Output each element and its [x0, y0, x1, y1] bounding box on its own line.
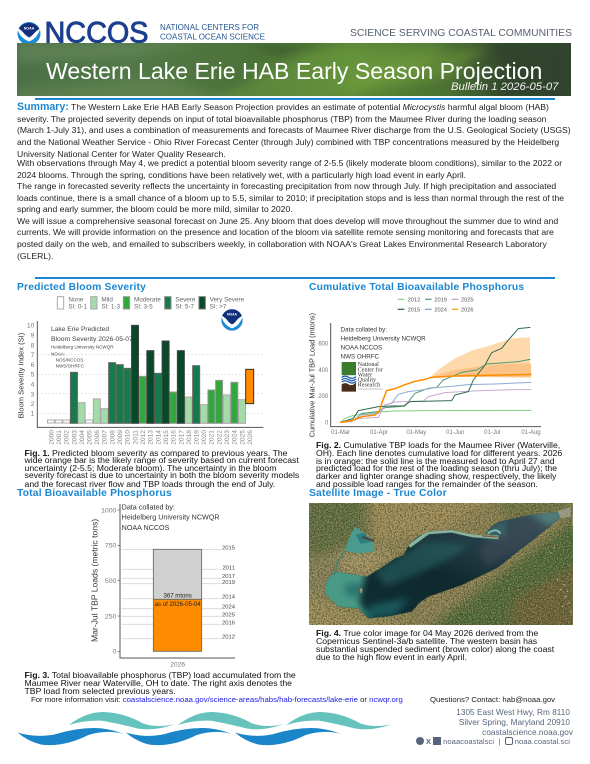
summary text: The range in forecasted severity reflects the uncertainty in forecasting precipitation from now through July. If high precipitation and associated	[17, 181, 556, 191]
data credit: NOAA NCCOS	[122, 524, 170, 532]
legend: Very Severe	[210, 297, 245, 304]
chart: cumulative TBP load: 0	[325, 420, 329, 426]
chart: bloom severity bars: 4	[31, 381, 35, 388]
footer: contact: Questions? Contact: hab@noaa.gov	[430, 695, 555, 704]
caption: figure 4: due to the high flow event in early April.	[316, 652, 467, 662]
summary text: (GLERL).	[17, 251, 53, 261]
caption: figure 4: Copernicus Sentinel-3a/b satellite. The western basin has	[316, 636, 537, 646]
footer: address	[416, 708, 573, 746]
caption: figure 4	[72, 588, 554, 722]
chart: cumulative TBP load: 01-Apr	[370, 430, 388, 436]
chart: cumulative TBP load: 600	[318, 342, 329, 348]
legend: SI: 0-1	[68, 304, 87, 311]
year labels: 2001	[56, 430, 63, 445]
logo: National Center for Water Quality Research: Quality	[358, 378, 377, 384]
title: Western Lake Erie HAB Early Season Projection	[46, 58, 542, 84]
right axis year labels: 2015	[222, 545, 235, 551]
chart annotation	[51, 326, 133, 369]
chart: bloom severity bars	[17, 296, 264, 445]
right axis year labels: 2012	[222, 635, 235, 641]
chart: total TBP bar: 0	[113, 649, 117, 656]
legend: SI: 1-3	[101, 304, 120, 311]
logo: National Center for Water Quality Research: Water	[358, 372, 372, 378]
chart: bloom severity bars: 10	[27, 323, 35, 330]
chart: bloom severity bars: 2	[31, 401, 35, 408]
chart: cumulative TBP load: 01-Jun	[446, 430, 464, 436]
summary text: currents. We will provide information on the presence and location of the bloom via satellite remote sensing monitoring and forecasts that are	[17, 227, 554, 237]
caption: figure 2: Fig. 2. Cumulative TBP loads for the Maumee River (Waterville,	[316, 440, 560, 450]
chart: bloom severity bars: Bloom Severity Index (SI)	[17, 332, 26, 418]
legend: Mild	[101, 297, 113, 304]
legend: 2019	[434, 297, 447, 303]
summary text: 2024 blooms. Through the spring, conditions have been relatively wet, with a particularly high load event in early April.	[17, 170, 466, 180]
caption: figure 1: and the forecast river flow and TBP loads through the end of July.	[24, 478, 275, 488]
year labels: 2010	[125, 430, 132, 445]
caption: figure 2: predicted load for the rest of the loading season (thru July); the	[316, 463, 557, 473]
load lines	[341, 327, 531, 422]
caption: figure 1: severity forecast is due to uncertainty in both the bloom severity models	[24, 470, 299, 480]
logo: National Center for Water Quality Research: Center for	[358, 366, 383, 373]
legend: 2024	[434, 307, 447, 313]
chart annotation: NWS/OHRFC	[56, 364, 85, 369]
social handles: X noaacoastalsci | noaa.coastal.sci	[426, 737, 570, 746]
summary text: loads continue, there is a small chance of a bloom up to 5.5, similar to 2010; if precipitation stops and is less than normal through the rest of the	[17, 193, 564, 203]
logo: National Center for Water Quality Research	[342, 362, 383, 392]
chart: bloom severity bars: 6	[31, 362, 35, 369]
caption: figure 3: Maumee River near Waterville, OH to date. The right axis denotes the	[24, 678, 292, 688]
teal waves	[69, 712, 392, 729]
legend: 2015	[408, 307, 420, 313]
year labels: 2022	[216, 430, 223, 445]
chart: total TBP bar: 250	[105, 613, 117, 620]
right axis year labels: 2016	[222, 620, 235, 626]
chart: total TBP bar: 2026	[170, 662, 185, 669]
heading: Predicted Bloom Severity: Predicted Bloom Severity	[17, 282, 146, 293]
tagline: SCIENCE SERVING COASTAL COMMUNITIES	[350, 28, 572, 39]
data credit: NOAA NCCOS	[341, 344, 382, 351]
caption: figure 3: TBP load from selected previous years.	[24, 686, 176, 696]
chart: total TBP bar: 500	[105, 578, 117, 585]
right axis year labels: 2024	[222, 605, 236, 611]
chart annotation: NOAA:	[51, 351, 65, 356]
chart: cumulative TBP load: 01-Aug	[521, 430, 541, 436]
chart annotation: Bloom Severity 2026-05-07	[51, 336, 133, 343]
reference year lines	[122, 550, 222, 639]
summary text: posted daily on the web, and emailed to subscribers weekly, in collaboration with NOAA's Great Lakes Environmental Research Laboratory	[17, 239, 547, 249]
legend: Moderate	[134, 297, 161, 304]
year labels: 2002	[64, 430, 71, 445]
legend	[57, 297, 245, 311]
caption: figure 3: Fig. 3. Total bioavailable phosphorus (TBP) load accumulated from the	[24, 670, 296, 680]
heading: Total Bioavailable Phosphorus: Total Bioavailable Phosphorus	[17, 488, 172, 499]
chart annotation: Heidelberg University NCWQR	[51, 345, 114, 350]
legend	[398, 297, 474, 313]
bulletin date: Bulletin 1 2026-05-07	[451, 81, 558, 93]
legend: None	[68, 297, 84, 304]
island and clouds	[360, 588, 362, 593]
bar: 2026 load	[153, 549, 202, 651]
chart: bloom severity bars: 1	[31, 411, 35, 418]
year labels: 2020	[201, 430, 208, 445]
legend: 2012	[408, 297, 420, 303]
icon: NOAA emblem: NOAA	[24, 26, 35, 30]
year labels: 2018	[186, 430, 193, 445]
chart: bloom severity bars: 5	[31, 372, 35, 379]
wordmark subtitle	[160, 22, 265, 42]
chart: cumulative TBP load	[308, 297, 541, 437]
legend: Severe	[175, 297, 196, 304]
footer: address: Silver Spring, Maryland 20910	[459, 718, 570, 727]
right axis year labels: 2011	[222, 566, 235, 572]
wordmark subtitle: NATIONAL CENTERS FOR	[160, 22, 259, 32]
year labels: 2006	[94, 430, 101, 445]
year labels: 2015	[163, 430, 170, 445]
year labels: 2008	[109, 430, 116, 445]
axes	[120, 504, 235, 658]
chart: total TBP bar: as of 2026-05-04	[155, 601, 201, 608]
heading: Satellite Image: Satellite Image - True Color	[309, 488, 447, 499]
caption: figure 2: is in orange: the solid line is the measured load to April 27 and	[316, 456, 555, 466]
axes	[37, 321, 263, 427]
summary text: (March 1-July 31), and uses a combination of measurements and forecasts of Maumee River discharge from the U.S. Geological Society (USGS)	[17, 125, 571, 135]
chart: bloom severity bars: 3	[31, 391, 35, 398]
satellite image: Lake Erie	[108, 503, 573, 746]
caption: figure 2: and possible load ranges for the remainder of the season.	[316, 479, 538, 489]
data credit	[122, 503, 219, 532]
year labels: 2009	[117, 430, 124, 445]
forecast ranges	[428, 337, 530, 378]
summary text	[17, 100, 571, 261]
caption: figure 1	[24, 448, 299, 488]
summary text: spring and early summer, the bloom could be more mild, similar to 2020.	[17, 204, 293, 214]
legend: SI: 3-5	[134, 304, 153, 311]
right axis year labels: 2014	[222, 595, 236, 601]
year labels: 2005	[87, 430, 94, 445]
chart: total TBP bar	[89, 503, 236, 669]
legend: SI: 5-7	[175, 304, 194, 311]
data credit: Heidelberg University NCWQR	[122, 514, 219, 522]
icon: NOAA emblem small	[221, 309, 243, 331]
right axis year labels	[222, 545, 236, 641]
year labels: 2017	[178, 430, 185, 445]
caption: figure 1: uncertainty (2-5.5; Moderate bloom). The uncertainty in the bloom	[24, 462, 276, 472]
year labels: 2004	[79, 430, 86, 445]
right axis year labels: 2017	[222, 574, 235, 580]
logo: National Center for Water Quality Research: National	[358, 362, 379, 368]
caption: figure 1: wide orange bar is the likely range of severity based on current forecast	[24, 455, 299, 465]
year labels: 2011	[132, 430, 139, 444]
right axis year labels: 2025	[222, 613, 235, 619]
year labels: 2019	[194, 430, 201, 445]
heading: Cumulative TBP: Cumulative Total Bioavailable Phosphorus	[309, 282, 524, 293]
caption: figure 4: Fig. 4. True color image for 04 May 2026 derived from the	[316, 628, 538, 638]
year labels: 2014	[155, 430, 162, 445]
chart: bloom severity bars: 8	[31, 342, 35, 349]
year labels: 2026	[247, 430, 254, 445]
chart: cumulative TBP load: 01-Mar	[331, 430, 350, 436]
legend: SI: >7	[210, 304, 227, 311]
year labels: 2016	[171, 430, 178, 445]
chart: bloom severity bars: 7	[31, 352, 35, 359]
year labels: 2023	[224, 430, 231, 445]
data credit: NWS OHRFC	[341, 353, 380, 360]
chart annotation: Lake Erie Predicted	[51, 326, 109, 333]
summary text: With observations through May 4, we predict a potential bloom severity range of 2-5.5 (likely moderate bloom conditions), similar to the 2022 or	[17, 158, 562, 168]
caption: figure 3	[24, 670, 296, 696]
year labels: 2000	[48, 430, 55, 445]
caption: figure 4: substantial suspended sediment (brown color) along the coast	[316, 644, 554, 654]
summary text: University National Center for Water Quality Research.	[17, 149, 226, 159]
axes	[331, 323, 541, 427]
icon: NOAA emblem small: NOAA	[227, 312, 237, 316]
summary text: and the National Weather Service - Ohio River Forecast Center (through July) combined with TBP concentrations measured by the Heidelberg	[17, 137, 559, 147]
year labels: 2024	[232, 430, 239, 445]
waves graphic	[18, 712, 392, 746]
summary text: severity. The projected severity depends on input of total bioavailable phosphorus (TBP) from the Maumee River during the loading season	[17, 114, 546, 124]
year labels: 2012	[140, 430, 147, 445]
footer: more information: For more information visit: coastalscience.noaa.gov/science-areas/habs/hab-forecasts/lake-erie or ncwqr.org	[31, 695, 403, 704]
chart annotation: NOS/NCCOS	[56, 357, 83, 362]
logo: National Center for Water Quality Research: Research	[358, 383, 380, 389]
summary text: Summary: The Western Lake Erie HAB Early Season Projection provides an estimate of potential Microcystis harmful algal bloom (HAB)	[17, 100, 549, 112]
data credit: Data collated by:	[122, 503, 175, 511]
caption: figure 2: darker and lighter orange shading show, respectively, the likely	[316, 471, 556, 481]
chart: cumulative TBP load: 400	[318, 368, 329, 374]
header logo: NCCOS	[18, 20, 265, 45]
year labels: 2013	[148, 430, 155, 445]
legend: 2026	[461, 307, 474, 313]
chart: cumulative TBP load: 01-Jul	[484, 430, 500, 436]
year labels: 2021	[209, 430, 216, 445]
year labels	[48, 430, 254, 445]
lake body	[325, 512, 560, 618]
icon: NOAA emblem	[18, 22, 40, 45]
wordmark subtitle: COASTAL OCEAN SCIENCE	[160, 32, 265, 42]
title banner	[17, 43, 571, 96]
caption: figure 2	[316, 440, 562, 489]
chart: total TBP bar: 1000	[101, 507, 117, 514]
chart: total TBP bar: 367 mtons	[163, 592, 192, 599]
Lake St Clair and rivers	[334, 507, 571, 574]
bars	[47, 325, 254, 423]
data credit: Data collated by:	[341, 326, 387, 333]
chart: cumulative TBP load: 200	[318, 394, 329, 400]
chart: total TBP bar: 750	[105, 543, 117, 550]
year labels: 2025	[239, 430, 246, 445]
chart: cumulative TBP load: 01-May	[406, 430, 426, 436]
right axis year labels: 2019	[222, 580, 235, 586]
year labels: 2007	[102, 430, 109, 445]
chart: total TBP bar: Mar-Jul TBP Loads (metric tons)	[89, 519, 99, 642]
summary text: We will issue a comprehensive seasonal forecast on June 25. Any bloom that does develop will move throughout the summer due to wind and	[17, 216, 558, 226]
data credit: Heidelberg University NCWQR	[341, 335, 426, 342]
caption: figure 2: OH). Each line denotes cumulative load for different years. 2026	[316, 448, 562, 458]
footer: address: 1305 East West Hwy, Rm 8110	[456, 708, 570, 717]
blue waves	[18, 728, 341, 745]
chart: cumulative TBP load: Cumulative Mar-Jul TBP Load (mtons)	[308, 313, 317, 437]
year labels: 2003	[71, 430, 78, 445]
chart: bloom severity bars: 9	[31, 333, 35, 340]
caption: figure 1: Fig. 1. Predicted bloom severity as compared to previous years. The	[24, 448, 288, 458]
footer: address: coastalscience.noaa.gov	[482, 728, 573, 737]
legend: 2025	[461, 297, 474, 303]
data credit	[341, 326, 426, 360]
